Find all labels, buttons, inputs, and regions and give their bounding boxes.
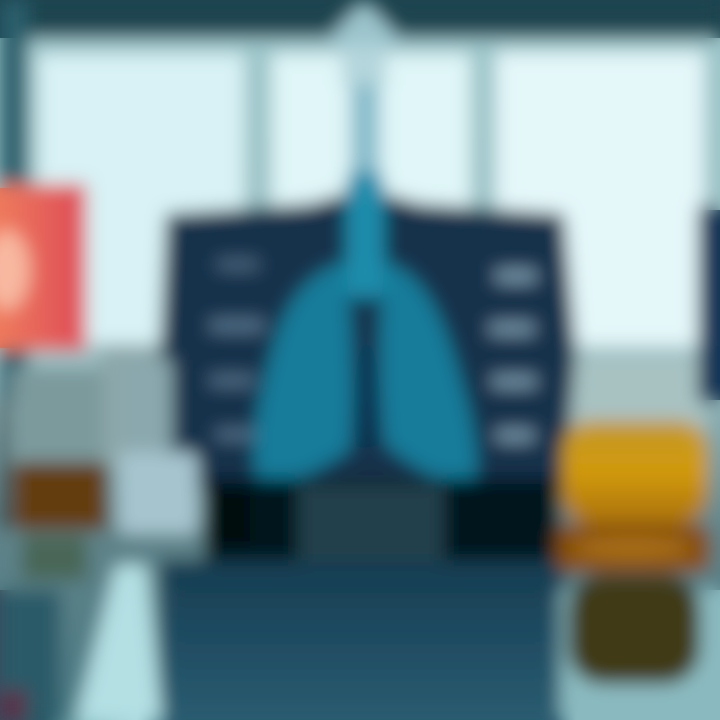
monitor text lines left [210,261,264,439]
bottom left dark area [0,590,60,720]
dark gap between bottle and panel [204,490,250,544]
bright spot [0,230,30,310]
bottom left corner tint [0,690,26,720]
lungs [254,172,477,485]
jar reflection [568,574,700,684]
lower wall right [566,355,706,435]
red panel [0,184,86,350]
dark monitor panel [160,188,576,490]
table back dark band [205,478,560,562]
trachea [346,172,384,298]
right lung [380,262,477,485]
tube above trachea [350,85,380,185]
right amber jar [556,420,710,684]
left base shadow [0,400,8,530]
light fixture cone [320,0,408,85]
amber liquid [12,462,108,530]
window panes [38,52,704,346]
left lung [254,262,353,483]
lung centre gap [354,325,380,450]
bottom right surface [560,590,720,720]
monitor text lines right [490,270,536,441]
jar base [556,524,710,572]
right edge dark panel [698,206,720,402]
left dark edge [0,0,28,400]
table surface [160,560,565,720]
left glass [12,368,108,580]
left bottle [118,360,198,534]
top dark band [0,0,720,38]
left light reflection [76,565,162,720]
lower wall left [100,345,180,465]
